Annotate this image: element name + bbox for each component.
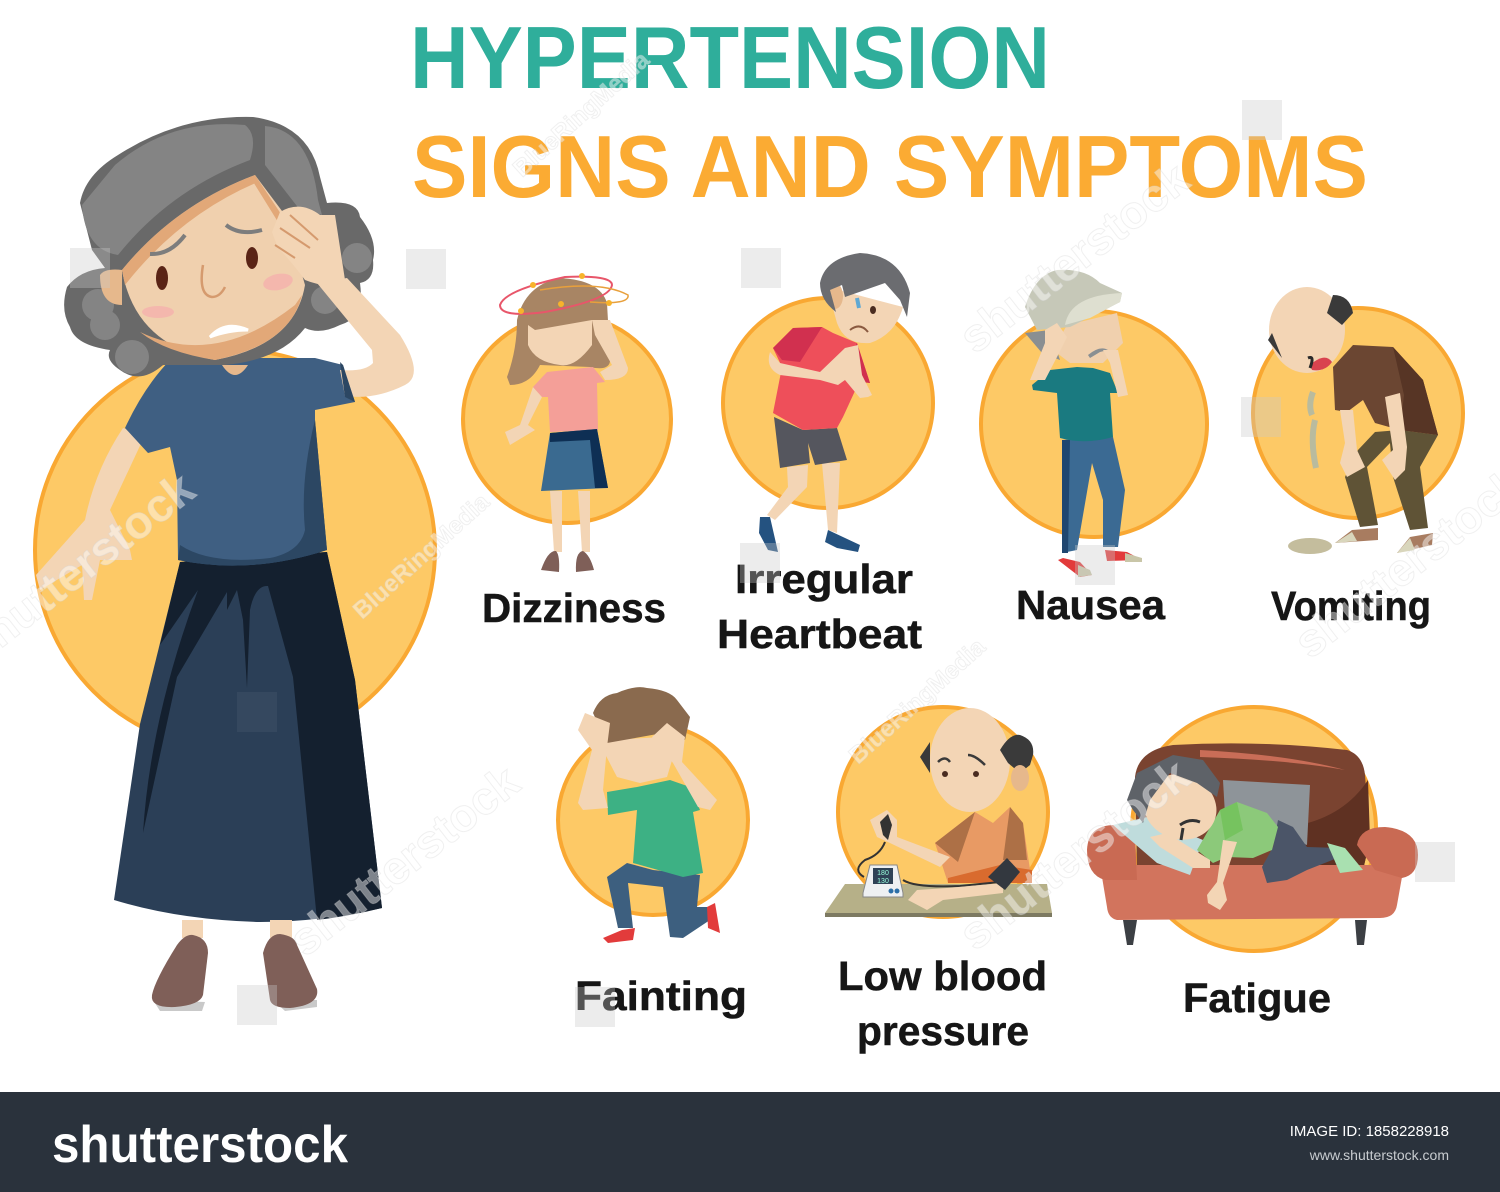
watermarks: shutterstock <box>279 755 529 966</box>
shirt <box>607 780 703 877</box>
tube <box>858 842 1000 886</box>
raised arm and hand <box>317 278 414 397</box>
mouth <box>1310 358 1332 370</box>
shirt <box>773 327 870 430</box>
label: fatigue: Fatigue <box>1183 975 1331 1021</box>
sofa legs <box>1123 920 1367 945</box>
illustration: vomiting <box>1253 287 1463 554</box>
label: irregular heartbeat: Heartbeat <box>717 611 922 657</box>
label: fainting: Fainting <box>575 973 747 1019</box>
watermarks: BlueRingMedia <box>844 633 991 769</box>
shoes <box>1335 528 1433 553</box>
illustration: irregular heartbeat <box>723 253 933 552</box>
face <box>122 175 305 360</box>
sofa back <box>1135 743 1370 870</box>
illustration: nausea <box>981 270 1207 577</box>
monitor: 180 <box>877 870 889 877</box>
watermarks: shutterstock <box>949 749 1199 960</box>
hair <box>64 117 374 376</box>
watermarks: BlueRingMedia <box>348 488 495 624</box>
pants <box>607 863 710 938</box>
shoes <box>1058 550 1142 577</box>
vomit puddle <box>1288 538 1332 554</box>
footer bar <box>0 1092 1500 1192</box>
eyes, brows, cheeks and mouth <box>156 266 168 290</box>
pants <box>1262 820 1340 883</box>
label: vomiting: Vomiting <box>1271 583 1431 629</box>
illustration: elderly woman with headache <box>35 117 435 1011</box>
label: low blood pressure: pressure <box>857 1008 1029 1054</box>
shirt <box>533 367 605 432</box>
arms <box>505 387 542 445</box>
skirt <box>114 552 382 922</box>
website: www.shutterstock.com <box>1309 1147 1449 1163</box>
grey pillow <box>1223 780 1310 845</box>
head <box>1134 764 1226 850</box>
footer logo: shutterstock <box>52 1116 348 1174</box>
title <box>410 8 1368 216</box>
hair <box>1127 755 1220 823</box>
jeans <box>1062 437 1125 553</box>
shorts <box>774 417 847 468</box>
monitor <box>863 865 903 897</box>
shirt <box>1333 345 1438 435</box>
face <box>1053 313 1123 363</box>
torso <box>935 807 1032 883</box>
hair <box>820 253 910 317</box>
pants <box>1345 430 1438 530</box>
arms <box>578 713 610 810</box>
blue pillow <box>1113 817 1203 875</box>
shirt <box>1197 802 1278 863</box>
raised arm with bulb <box>870 810 950 867</box>
table <box>825 884 1052 913</box>
label: nausea: Nausea <box>1016 582 1166 628</box>
socks <box>1327 843 1363 873</box>
shirt <box>125 358 355 566</box>
shoes <box>603 903 720 943</box>
shirt <box>1032 367 1118 441</box>
ear <box>100 270 122 305</box>
label: irregular heartbeat <box>717 556 922 657</box>
skirt <box>541 429 608 491</box>
sleeve cuff <box>340 362 355 402</box>
arms <box>1207 840 1237 910</box>
left arm <box>36 428 145 600</box>
shoes <box>759 517 860 552</box>
face <box>603 737 673 783</box>
vomit stream <box>1310 392 1316 468</box>
label: irregular heartbeat: Irregular <box>735 556 913 602</box>
legs <box>767 463 840 533</box>
legs and shoes <box>550 491 590 552</box>
hair <box>593 687 690 743</box>
label: low blood pressure <box>838 953 1047 1054</box>
head <box>1269 287 1345 373</box>
arms <box>1340 410 1365 477</box>
watermarks: BlueRingMedia <box>508 46 655 182</box>
illustration: low blood pressure <box>825 707 1052 917</box>
label: dizziness: Dizziness <box>482 585 666 631</box>
arms <box>769 345 872 398</box>
lower arm and hand <box>908 883 1003 910</box>
hat <box>1025 270 1122 330</box>
dizzy rings and stars <box>500 277 612 314</box>
monitor: 130 <box>877 878 889 885</box>
watermarks: shutterstock <box>949 152 1199 363</box>
hair <box>507 278 610 385</box>
face <box>528 318 592 365</box>
face <box>827 287 903 343</box>
arms <box>1030 323 1067 380</box>
illustration: fainting <box>558 687 748 943</box>
title: SIGNS AND SYMPTOMS <box>412 117 1368 216</box>
legs and shoes <box>182 920 292 938</box>
illustration: fatigue <box>1087 707 1418 951</box>
cuff <box>988 858 1020 890</box>
image id: IMAGE ID: 1858228918 <box>1290 1123 1449 1140</box>
illustration: dizziness <box>463 273 671 572</box>
label: low blood pressure: Low blood <box>838 953 1047 999</box>
head <box>930 708 1010 812</box>
sofa armrests <box>1087 825 1137 880</box>
sofa base <box>1102 865 1402 920</box>
title: HYPERTENSION <box>410 8 1050 107</box>
